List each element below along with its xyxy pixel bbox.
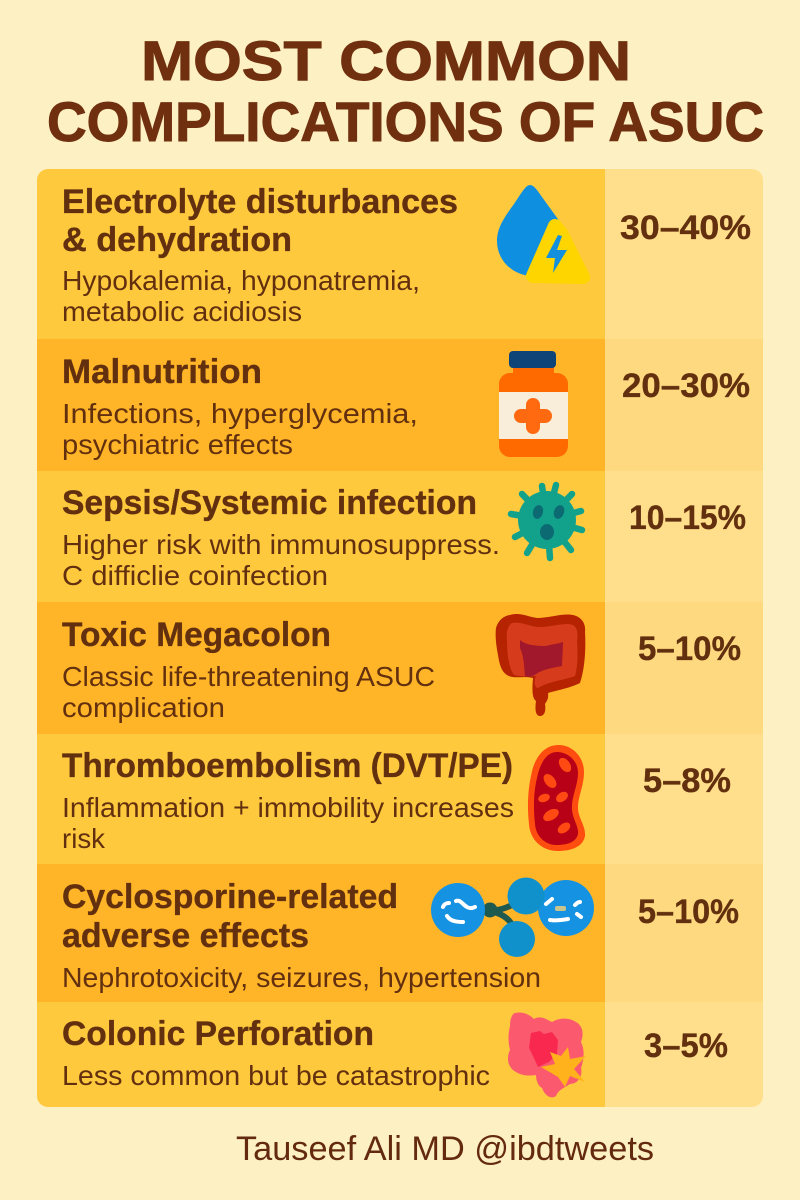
icon: medicine bottle (499, 351, 568, 457)
footer credit: Tauseef Ali MD @ibdtweets (236, 1130, 654, 1168)
row: cyclosporine: adverse effects (62, 917, 309, 955)
row: electrolyte disturbances (62, 183, 458, 327)
row: thromboembolism (62, 747, 514, 854)
row: thromboembolism: risk (62, 823, 106, 854)
percentage: sepsis: 10–15% (629, 499, 746, 537)
percentage: toxic megacolon: 5–10% (638, 630, 741, 668)
percentage: cyclosporine: 5–10% (638, 893, 739, 931)
percentage: thromboembolism: 5–8% (643, 762, 731, 800)
table background (37, 169, 763, 1107)
row: thromboembolism: Inflammation + immobility increases (62, 792, 514, 823)
title: MOST COMMON (141, 29, 631, 92)
row: colonic perforation: Less common but be catastrophic (62, 1060, 490, 1091)
row: toxic megacolon (62, 616, 435, 723)
row: malnutrition (62, 353, 418, 460)
row: colonic perforation (62, 1015, 490, 1091)
row: cyclosporine: Cyclosporine-related (62, 878, 398, 916)
row: toxic megacolon: Toxic Megacolon (62, 616, 331, 654)
percentage: colonic perforation: 3–5% (644, 1027, 728, 1065)
row: electrolyte disturbances: & dehydration (62, 221, 292, 259)
percentage: malnutrition: 20–30% (622, 367, 750, 405)
row: sepsis: C difficlie coinfection (62, 560, 328, 591)
row: cyclosporine: Nephrotoxicity, seizures, hypertension (62, 962, 541, 993)
icon: perforated colon (508, 1012, 586, 1097)
icon: molecule (431, 878, 594, 957)
row: sepsis: Higher risk with immunosuppress. (62, 529, 500, 560)
row: cyclosporine (62, 878, 541, 993)
row: sepsis: Sepsis/Systemic infection (62, 484, 477, 522)
row: electrolyte disturbances: Electrolyte disturbances (62, 183, 458, 221)
row: malnutrition: psychiatric effects (62, 429, 293, 460)
row: sepsis (62, 484, 500, 591)
icon: water drop with lightning warning (497, 185, 583, 277)
row: colonic perforation: Colonic Perforation (62, 1015, 374, 1053)
row: malnutrition: Infections, hyperglycemia, (62, 398, 418, 429)
icon: virus (511, 485, 582, 558)
icon: dilated colon (496, 614, 585, 716)
title: COMPLICATIONS OF ASUC (47, 90, 764, 153)
percentage: electrolyte: 30–40% (620, 209, 751, 247)
row: electrolyte disturbances: Hypokalemia, hyponatremia, (62, 265, 420, 296)
row: thromboembolism: Thromboembolism (DVT/PE) (62, 747, 513, 785)
row: toxic megacolon: Classic life-threatening ASUC (62, 661, 435, 692)
row: malnutrition: Malnutrition (62, 353, 262, 391)
icon: blood clot vessel (528, 745, 585, 851)
row: electrolyte disturbances: metabolic acidiosis (62, 296, 302, 327)
row: toxic megacolon: complication (62, 692, 225, 723)
title (47, 29, 764, 153)
